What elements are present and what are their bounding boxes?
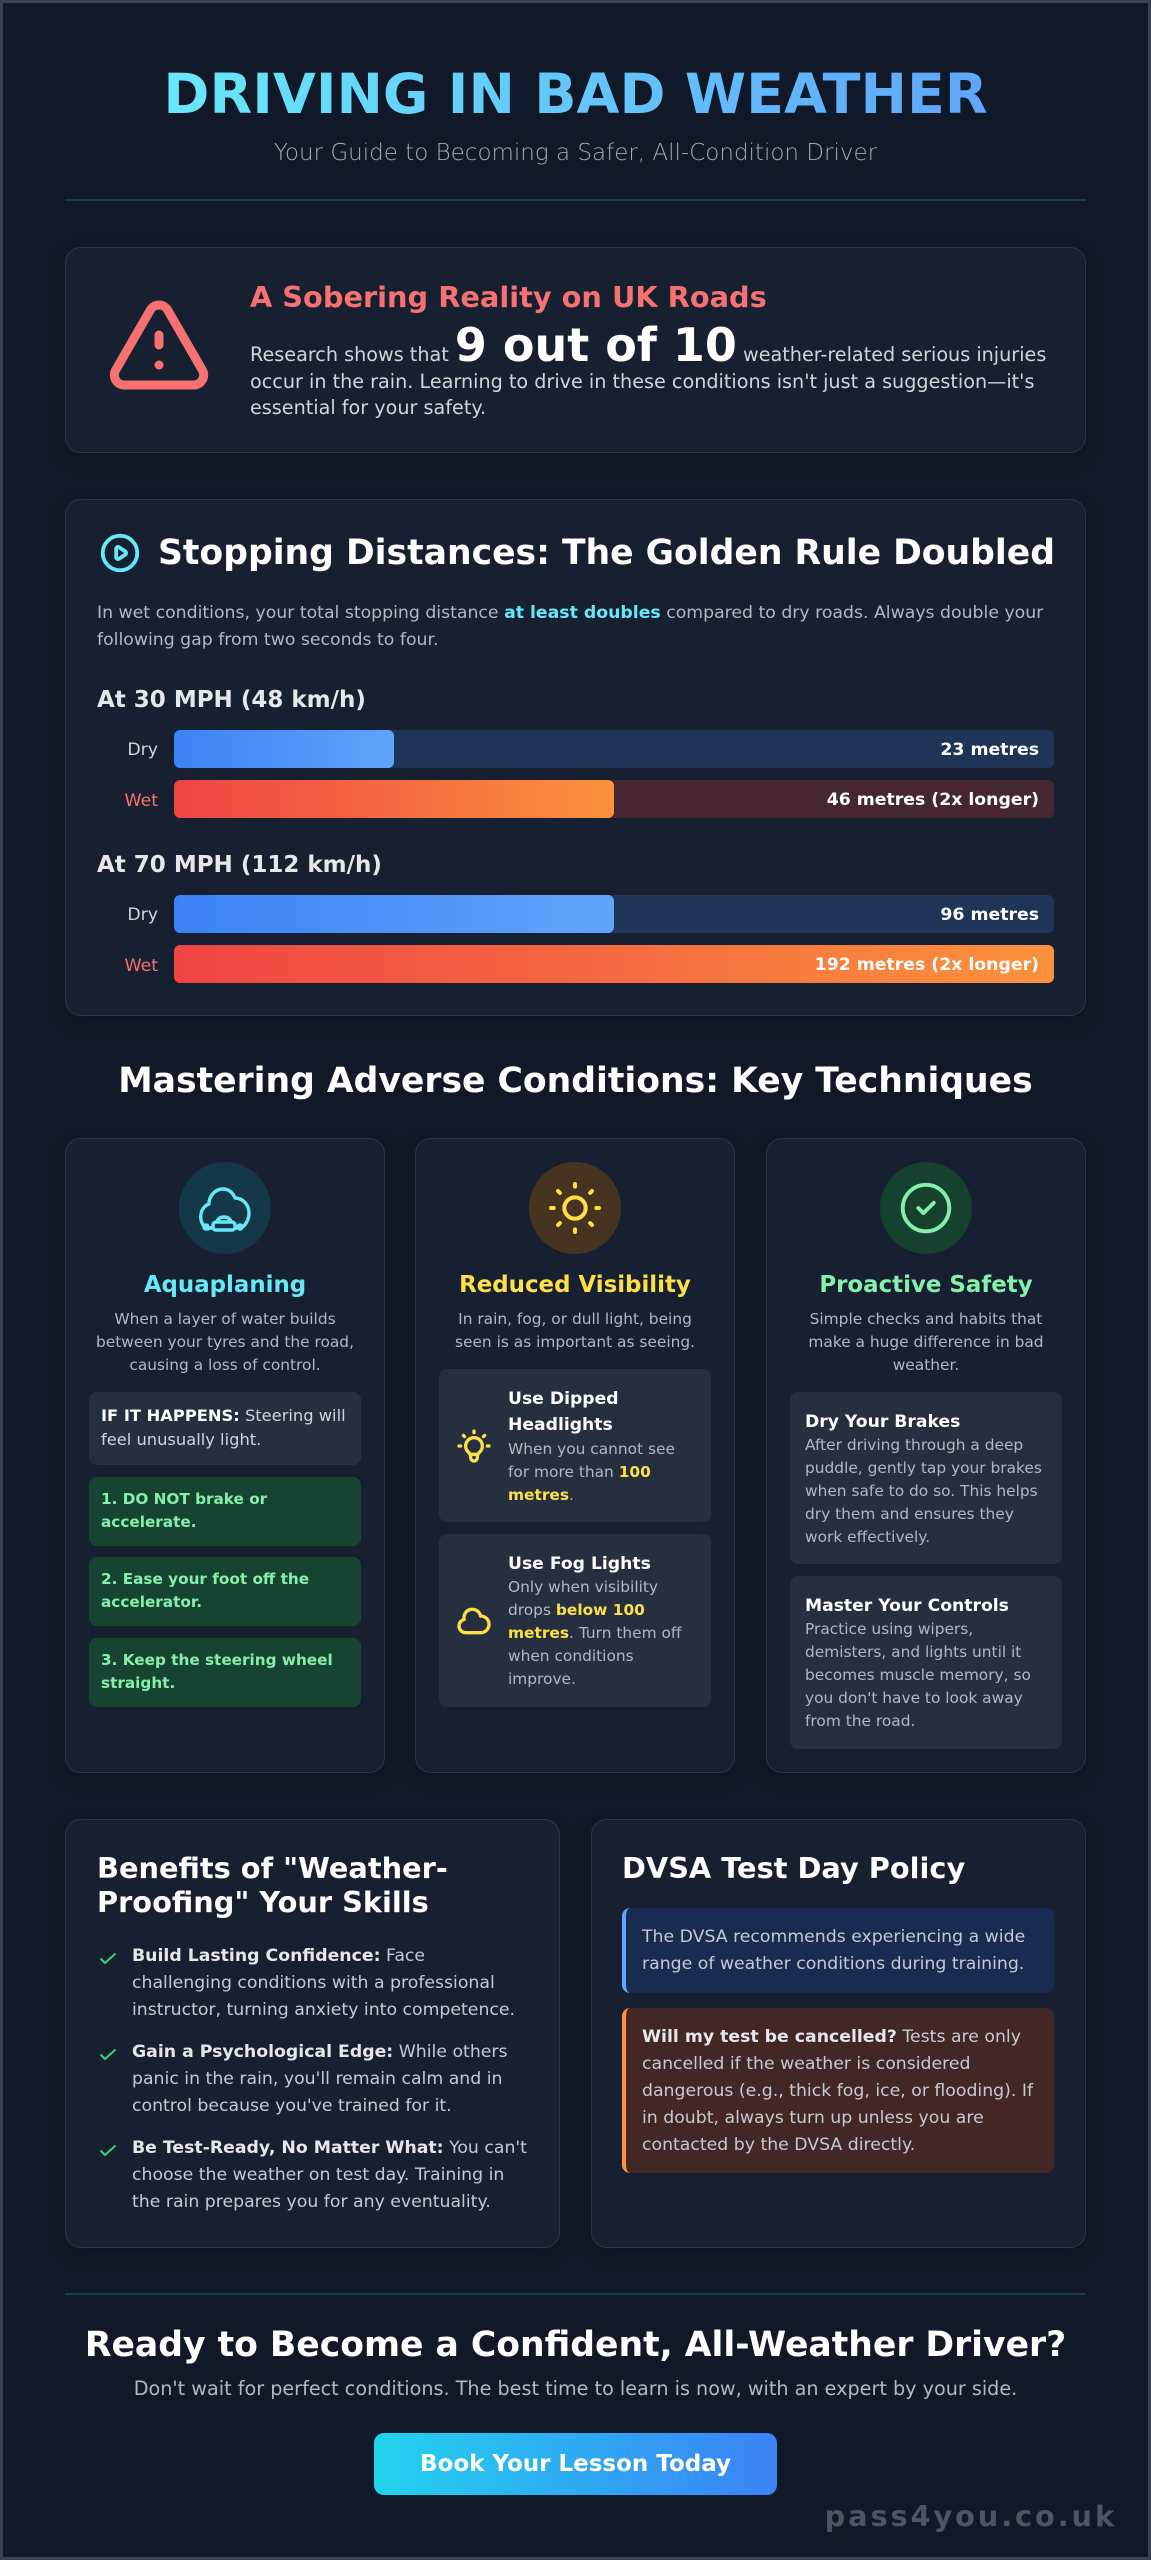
benefit text: instructor, turning anxiety into competence. bbox=[132, 2000, 515, 2020]
warning text bbox=[101, 1406, 346, 1449]
bar chart heading: 30 mph: At 30 MPH (48 km/h) bbox=[97, 687, 366, 713]
tip text: dry them and ensures they bbox=[805, 1505, 1014, 1523]
subtitle: Your Guide to Becoming a Safer, All-Condition Driver bbox=[274, 140, 877, 166]
bar: dry 96 metres bbox=[174, 895, 1054, 933]
card description bbox=[808, 1310, 1044, 1374]
tip text: When you cannot see bbox=[508, 1440, 675, 1458]
icon: play circle bbox=[100, 534, 140, 572]
bar chart: 70 mph bbox=[125, 895, 1054, 983]
bar: wet 192 metres: 192 metres (2x longer) bbox=[815, 955, 1039, 975]
tip text: drops below 100 bbox=[508, 1601, 645, 1619]
tip text: for more than 100 bbox=[508, 1463, 651, 1481]
benefits heading: Benefits of "Weather- bbox=[97, 1851, 448, 1885]
benefit text: choose the weather on test day. Training in bbox=[132, 2165, 504, 2185]
benefit text bbox=[132, 2138, 527, 2212]
benefit text bbox=[132, 2042, 508, 2116]
bar: wet 46 metres: 46 metres (2x longer) bbox=[827, 790, 1039, 810]
benefit text: challenging conditions with a professional bbox=[132, 1973, 495, 1993]
cancellation text: contacted by the DVSA directly. bbox=[642, 2135, 915, 2155]
step 3 bbox=[89, 1638, 361, 1707]
test cancellation box bbox=[622, 2008, 1054, 2173]
label: dry: Dry bbox=[127, 740, 158, 760]
recommendation text: The DVSA recommends experiencing a wide bbox=[642, 1927, 1025, 1947]
cancellation text: in doubt, always turn up unless you are bbox=[642, 2108, 984, 2128]
benefit 3 bbox=[100, 2138, 527, 2212]
benefit text: panic in the rain, you'll remain calm and in bbox=[132, 2069, 502, 2089]
tip: dipped headlights bbox=[439, 1369, 711, 1522]
tip text: demisters, and lights until it bbox=[805, 1643, 1021, 1661]
panel: benefits bbox=[65, 1819, 560, 2248]
icon: check bbox=[100, 2049, 116, 2060]
section heading: key techniques: Mastering Adverse Conditions: Key Techniques bbox=[118, 1061, 1033, 1101]
alert text bbox=[250, 318, 1046, 419]
icon: sun bbox=[529, 1162, 621, 1254]
tip text: puddle, gently tap your brakes bbox=[805, 1459, 1042, 1477]
warning box bbox=[89, 1392, 361, 1465]
tip text bbox=[508, 1578, 682, 1688]
card description: Simple checks and habits that bbox=[810, 1310, 1042, 1328]
panel: sobering reality alert bbox=[65, 247, 1086, 453]
benefit text: the rain prepares you for any eventuality. bbox=[132, 2192, 491, 2212]
alert text: occur in the rain. Learning to drive in these conditions isn't just a suggestion—it's bbox=[250, 370, 1034, 393]
tip: dry your brakes bbox=[790, 1392, 1062, 1564]
alert heading: A Sobering Reality on UK Roads bbox=[250, 280, 767, 314]
recommendation text: range of weather conditions during training. bbox=[642, 1954, 1024, 1974]
panel: DVSA policy bbox=[591, 1819, 1086, 2248]
benefit text: Build Lasting Confidence: Face bbox=[132, 1946, 425, 1966]
panel: aquaplaning bbox=[65, 1138, 385, 1773]
DVSA heading: DVSA Test Day Policy bbox=[622, 1851, 965, 1885]
label: wet: Wet bbox=[125, 791, 158, 811]
card description: make a huge difference in bad bbox=[808, 1333, 1044, 1351]
benefit text: Gain a Psychological Edge: While others bbox=[132, 2042, 508, 2062]
alert text: Research shows that 9 out of 10 weather-related serious injuries bbox=[250, 318, 1046, 372]
footer text: Don't wait for perfect conditions. The best time to learn is now, with an expert by your side. bbox=[134, 2377, 1017, 2400]
tip: master your controls bbox=[790, 1576, 1062, 1749]
panel: reduced visibility bbox=[415, 1138, 735, 1773]
benefit 2 bbox=[100, 2042, 508, 2116]
stopping distances heading: Stopping Distances: The Golden Rule Doubled bbox=[158, 533, 1055, 573]
icon: check bbox=[100, 1953, 116, 1964]
footer heading: Ready to Become a Confident, All-Weather Driver? bbox=[85, 2325, 1066, 2365]
tip text: metres. bbox=[508, 1486, 574, 1504]
step 1 bbox=[89, 1477, 361, 1546]
watermark: pass4you.co.uk bbox=[825, 2499, 1117, 2533]
card description bbox=[96, 1310, 354, 1374]
card title: Reduced Visibility bbox=[459, 1272, 691, 1298]
tip text: work effectively. bbox=[805, 1528, 930, 1546]
tip text: you don't have to look away bbox=[805, 1689, 1023, 1707]
tip text: when conditions bbox=[508, 1647, 634, 1665]
bar chart heading: 70 mph: At 70 MPH (112 km/h) bbox=[97, 852, 382, 878]
card description: When a layer of water builds bbox=[114, 1310, 336, 1328]
cancellation text: Will my test be cancelled? Tests are only bbox=[642, 2027, 1021, 2047]
stopping distances intro text: In wet conditions, your total stopping distance at least doubles compared to dry roads. Always double your bbox=[97, 603, 1043, 623]
step 1: accelerate. bbox=[101, 1513, 197, 1531]
icon: warning triangle bbox=[110, 300, 208, 390]
bar: dry 23 metres bbox=[174, 730, 1054, 768]
benefit text: control because you've trained for it. bbox=[132, 2096, 452, 2116]
step 2: 2. Ease your foot off the bbox=[101, 1570, 309, 1588]
tip text bbox=[508, 1440, 675, 1504]
card description: weather. bbox=[893, 1356, 959, 1374]
tip title: Dry Your Brakes bbox=[805, 1412, 960, 1432]
card description: seen is as important as seeing. bbox=[455, 1333, 695, 1351]
tip title: Use Fog Lights bbox=[508, 1554, 651, 1574]
tip text: from the road. bbox=[805, 1712, 915, 1730]
button: book lesson bbox=[374, 2433, 777, 2495]
tip: fog lights bbox=[439, 1534, 711, 1707]
tip text: Practice using wipers, bbox=[805, 1620, 973, 1638]
bar: wet 192 metres bbox=[174, 945, 1054, 983]
bar chart: 30 mph bbox=[125, 730, 1054, 818]
step 2: accelerator. bbox=[101, 1593, 202, 1611]
benefits heading bbox=[97, 1851, 448, 1919]
bar: dry 96 metres: 96 metres bbox=[940, 905, 1039, 925]
button: book lesson: Book Your Lesson Today bbox=[420, 2451, 731, 2477]
tip title: Use Dipped bbox=[508, 1389, 619, 1409]
tip text: improve. bbox=[508, 1670, 576, 1688]
benefits heading: Proofing" Your Skills bbox=[97, 1885, 429, 1919]
icon: check bbox=[100, 2145, 116, 2156]
tip text: Only when visibility bbox=[508, 1578, 658, 1596]
tip title: Master Your Controls bbox=[805, 1596, 1009, 1616]
warning text: feel unusually light. bbox=[101, 1430, 261, 1449]
header title: DRIVING IN BAD WEATHER bbox=[163, 62, 988, 127]
cancellation text bbox=[642, 2027, 1034, 2155]
tip title: Headlights bbox=[508, 1415, 613, 1435]
icon: check circle bbox=[880, 1162, 972, 1254]
bar: dry 23 metres: 23 metres bbox=[940, 740, 1039, 760]
panel: stopping distances bbox=[65, 499, 1086, 1016]
step 3: 3. Keep the steering wheel bbox=[101, 1651, 333, 1669]
tip text bbox=[805, 1620, 1031, 1730]
bar: wet 46 metres bbox=[174, 780, 1054, 818]
stopping distances intro text bbox=[97, 603, 1044, 650]
label: wet: Wet bbox=[125, 956, 158, 976]
step 1: 1. DO NOT brake or bbox=[101, 1490, 267, 1508]
benefit 1 bbox=[100, 1946, 515, 2020]
icon: aquaplaning bbox=[179, 1162, 271, 1254]
benefit text: Be Test-Ready, No Matter What: You can't bbox=[132, 2138, 527, 2158]
icon: light bulb bbox=[457, 1429, 491, 1463]
step 3: straight. bbox=[101, 1674, 175, 1692]
card title: Proactive Safety bbox=[819, 1272, 1033, 1298]
tip title bbox=[508, 1389, 619, 1435]
label: dry: Dry bbox=[127, 905, 158, 925]
cancellation text: cancelled if the weather is considered bbox=[642, 2054, 970, 2074]
warning text: IF IT HAPPENS: Steering will bbox=[101, 1406, 346, 1425]
benefit text bbox=[132, 1946, 515, 2020]
stopping distances intro text: following gap from two seconds to four. bbox=[97, 630, 438, 650]
tip text: when safe to do so. This helps bbox=[805, 1482, 1038, 1500]
card description bbox=[455, 1310, 695, 1351]
cancellation text: dangerous (e.g., thick fog, ice, or flooding). If bbox=[642, 2081, 1033, 2101]
alert text: essential for your safety. bbox=[250, 396, 486, 419]
tip text: becomes muscle memory, so bbox=[805, 1666, 1031, 1684]
tip text: After driving through a deep bbox=[805, 1436, 1023, 1454]
icon: cloud bbox=[457, 1608, 491, 1634]
card description: causing a loss of control. bbox=[129, 1356, 321, 1374]
card description: In rain, fog, or dull light, being bbox=[458, 1310, 692, 1328]
recommendation text bbox=[642, 1927, 1025, 1974]
card title: Aquaplaning bbox=[144, 1272, 306, 1298]
tip text bbox=[805, 1436, 1042, 1546]
DVSA recommendation box bbox=[622, 1908, 1054, 1993]
panel: proactive safety bbox=[766, 1138, 1086, 1773]
tip text: metres. Turn them off bbox=[508, 1624, 682, 1642]
step 2 bbox=[89, 1557, 361, 1626]
card description: between your tyres and the road, bbox=[96, 1333, 354, 1351]
